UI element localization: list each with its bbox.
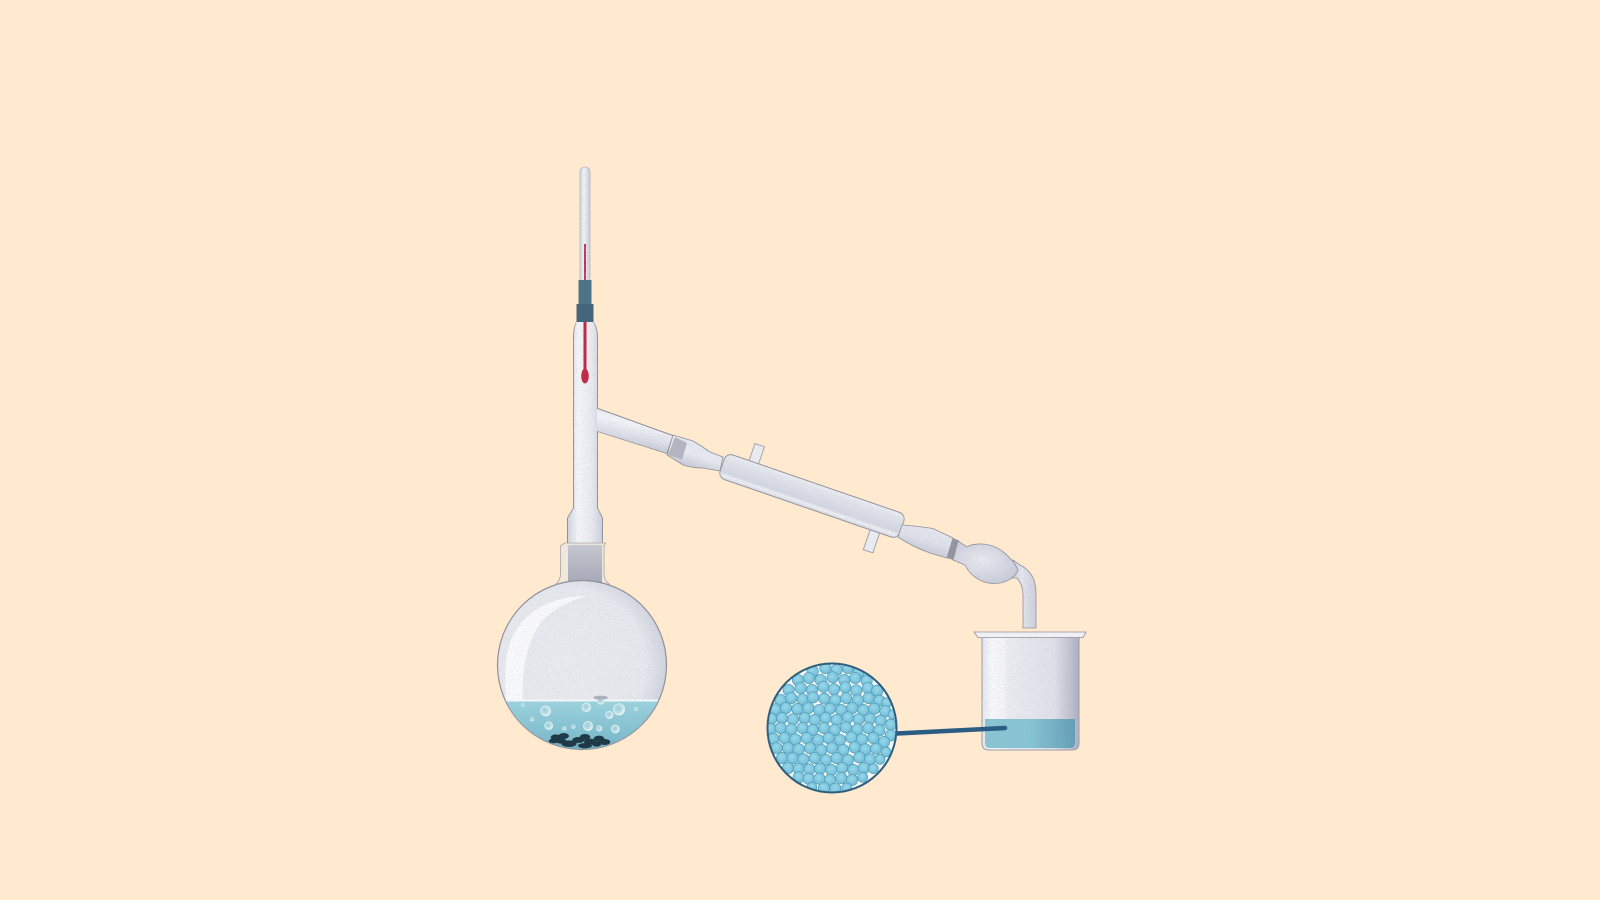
illustration: distillation apparatus — [496, 166, 1087, 794]
thermometer lower section and red bulb — [581, 322, 589, 384]
round-bottom flask — [496, 542, 668, 750]
beaker rim — [974, 632, 1086, 638]
condenser jacket — [718, 453, 906, 539]
side arm joint sleeve — [667, 435, 723, 471]
bubbles and boiling stones — [521, 696, 638, 748]
delivery tube — [953, 541, 1036, 628]
magnified view of molecules — [765, 662, 897, 794]
condenser water inlet — [749, 444, 764, 465]
magnifier ring — [768, 664, 896, 792]
glass column with side arm — [567, 322, 673, 582]
condenser — [711, 436, 912, 559]
rubber stopper — [576, 280, 594, 322]
beaker — [974, 632, 1086, 750]
receiver bulb — [953, 541, 1018, 584]
magnifier connector line — [897, 728, 1005, 734]
adapter — [898, 525, 959, 560]
thermometer stem — [580, 167, 590, 327]
molecules — [765, 662, 897, 794]
beaker liquid — [985, 719, 1075, 748]
flask glass — [496, 542, 668, 750]
condenser water outlet — [863, 529, 880, 553]
